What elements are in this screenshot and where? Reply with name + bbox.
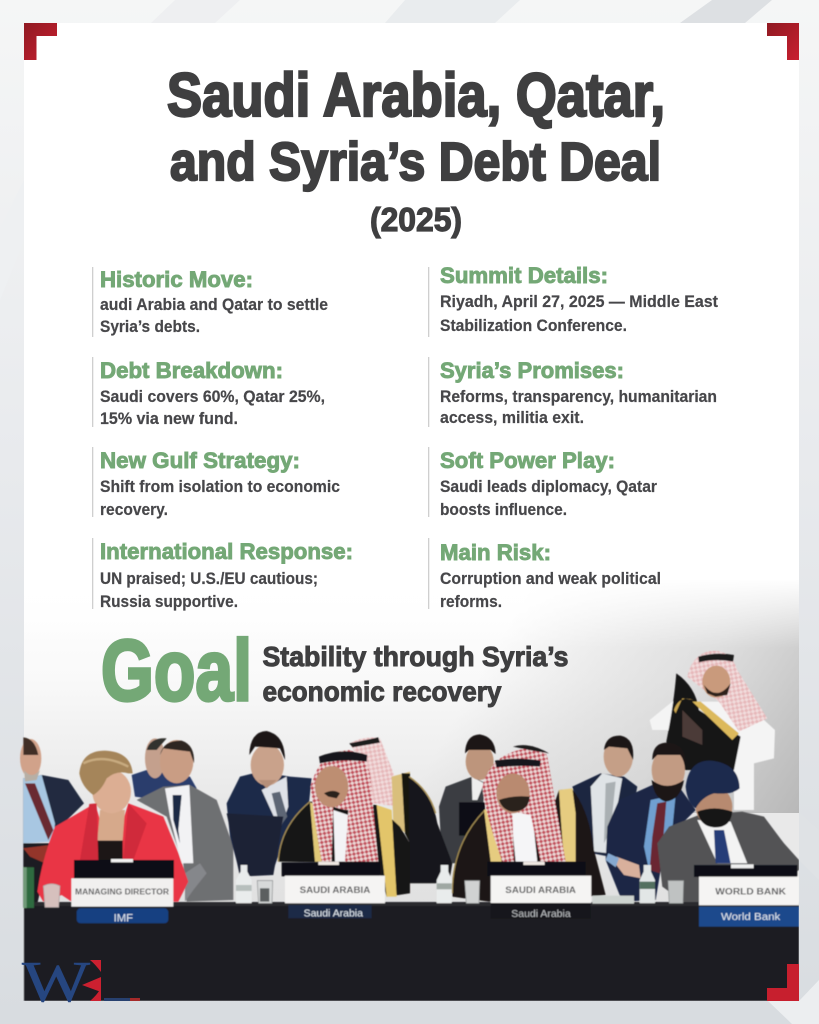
name plate: IMF: IMF <box>114 912 133 924</box>
panel: left column <box>92 267 353 611</box>
item: International Response: International Response: <box>100 539 353 564</box>
item: Summit Details: Stabilization Conference. <box>440 317 627 335</box>
icon: glass <box>43 884 60 907</box>
item: Historic Move: Syria’s debts. <box>100 318 200 336</box>
item: Debt Breakdown: Saudi covers 60%, Qatar 25%, <box>100 388 325 406</box>
person: man in grey suit <box>137 740 233 902</box>
name plate: Saudi Arabia left: SAUDI ARABIA <box>300 885 371 895</box>
photo: conference panel <box>20 651 799 1001</box>
item: Syria's Promises: Reforms, transparency, humanitarian <box>440 388 717 406</box>
icon: green bottle <box>23 867 34 908</box>
item: International Response <box>92 538 353 611</box>
name plate: IMF <box>71 859 174 924</box>
icon: glass <box>465 881 480 903</box>
name plate: World Bank: World Bank <box>721 912 780 923</box>
logo: WE: W <box>22 949 90 1014</box>
table items: left group <box>23 859 385 924</box>
item: Syria's Promises <box>428 357 717 427</box>
panel: right column <box>428 263 718 611</box>
person: Saudi delegate right <box>452 745 606 902</box>
item: Soft Power Play <box>428 447 658 519</box>
title: (2025) <box>370 201 462 238</box>
goal statement: Stability through Syria’s <box>262 641 568 672</box>
icon: bottle <box>437 865 452 903</box>
icon: bottle <box>236 865 252 903</box>
logo: WE <box>22 949 140 1014</box>
name plate: Saudi Arabia right <box>487 862 634 920</box>
goal statement: economic recovery <box>262 676 502 707</box>
person: man in dark turban <box>657 761 799 903</box>
person: man far left <box>20 737 84 907</box>
title: and Syria’s Debt Deal <box>170 132 661 192</box>
name plate: Saudi Arabia left <box>282 862 385 920</box>
item: Syria's Promises: access, militia exit. <box>440 409 584 427</box>
name plate: World Bank <box>694 864 799 927</box>
item: Main Risk: Corruption and weak political <box>440 570 661 588</box>
item: Syria's Promises: Syria’s Promises: <box>440 358 624 383</box>
goal callout <box>101 623 568 719</box>
icon: bottle <box>640 865 655 903</box>
corner bracket: top right <box>767 23 799 60</box>
name plate: Saudi Arabia right: Saudi Arabia <box>511 909 571 920</box>
person: woman in red jacket <box>37 751 188 902</box>
person: man in pink keffiyeh (rear) <box>349 737 410 843</box>
back row right <box>409 734 799 903</box>
item: Soft Power Play: Soft Power Play: <box>440 448 615 473</box>
title: Saudi Arabia, Qatar, <box>167 61 665 129</box>
item: Main Risk: Main Risk: <box>440 540 551 565</box>
name plate: Saudi Arabia left: Saudi Arabia <box>304 909 364 920</box>
item: Historic Move: Historic Move: <box>100 267 253 292</box>
item: Debt Breakdown: 15% via new fund. <box>100 410 238 428</box>
item: New Gulf Strategy <box>92 447 340 519</box>
person: bearded man in navy <box>606 743 696 902</box>
item: Main Risk <box>428 538 661 611</box>
name plate: World Bank: WORLD BANK <box>715 887 787 897</box>
item: Main Risk: reforms. <box>440 593 502 611</box>
corner bracket: top left <box>24 23 57 60</box>
item: Debt Breakdown <box>92 357 325 428</box>
item: International Response: Russia supportive. <box>100 593 238 611</box>
front row <box>37 745 606 902</box>
person: man with glasses <box>409 734 496 883</box>
item: International Response: UN praised; U.S./EU cautious; <box>100 570 318 588</box>
table items: right group <box>437 862 799 927</box>
person: man in navy suit <box>227 731 312 877</box>
item: Summit Details: Summit Details: <box>440 263 608 288</box>
name plate: IMF: MANAGING DIRECTOR <box>75 888 169 897</box>
item: Historic Move <box>92 267 328 337</box>
item: Summit Details <box>428 263 718 337</box>
icon: glass <box>257 881 273 903</box>
corner bracket: bottom right <box>767 964 799 1001</box>
person: rear navy attendee <box>132 738 197 803</box>
standing attendant <box>650 651 775 810</box>
item: New Gulf Strategy: New Gulf Strategy: <box>100 448 300 473</box>
item: Soft Power Play: Saudi leads diplomacy, Qatar <box>440 478 658 496</box>
icon: glass <box>668 881 684 903</box>
back row left <box>20 731 410 907</box>
item: Historic Move: audi Arabia and Qatar to settle <box>100 296 328 314</box>
photo wall <box>24 578 799 910</box>
title <box>167 61 665 238</box>
person: man with blue lanyard <box>572 736 637 857</box>
goal statement <box>262 641 568 707</box>
goal word: Goal <box>101 623 252 719</box>
item: New Gulf Strategy: recovery. <box>100 501 168 519</box>
name plate: Saudi Arabia right: SAUDI ARABIA <box>505 885 577 895</box>
item: Debt Breakdown: Debt Breakdown: <box>100 358 283 383</box>
item: New Gulf Strategy: Shift from isolation to economic <box>100 478 340 496</box>
item: Soft Power Play: boosts influence. <box>440 501 567 519</box>
table <box>24 902 799 1001</box>
item: Summit Details: Riyadh, April 27, 2025 — Middle East <box>440 293 718 311</box>
person: Saudi delegate left <box>278 750 410 897</box>
